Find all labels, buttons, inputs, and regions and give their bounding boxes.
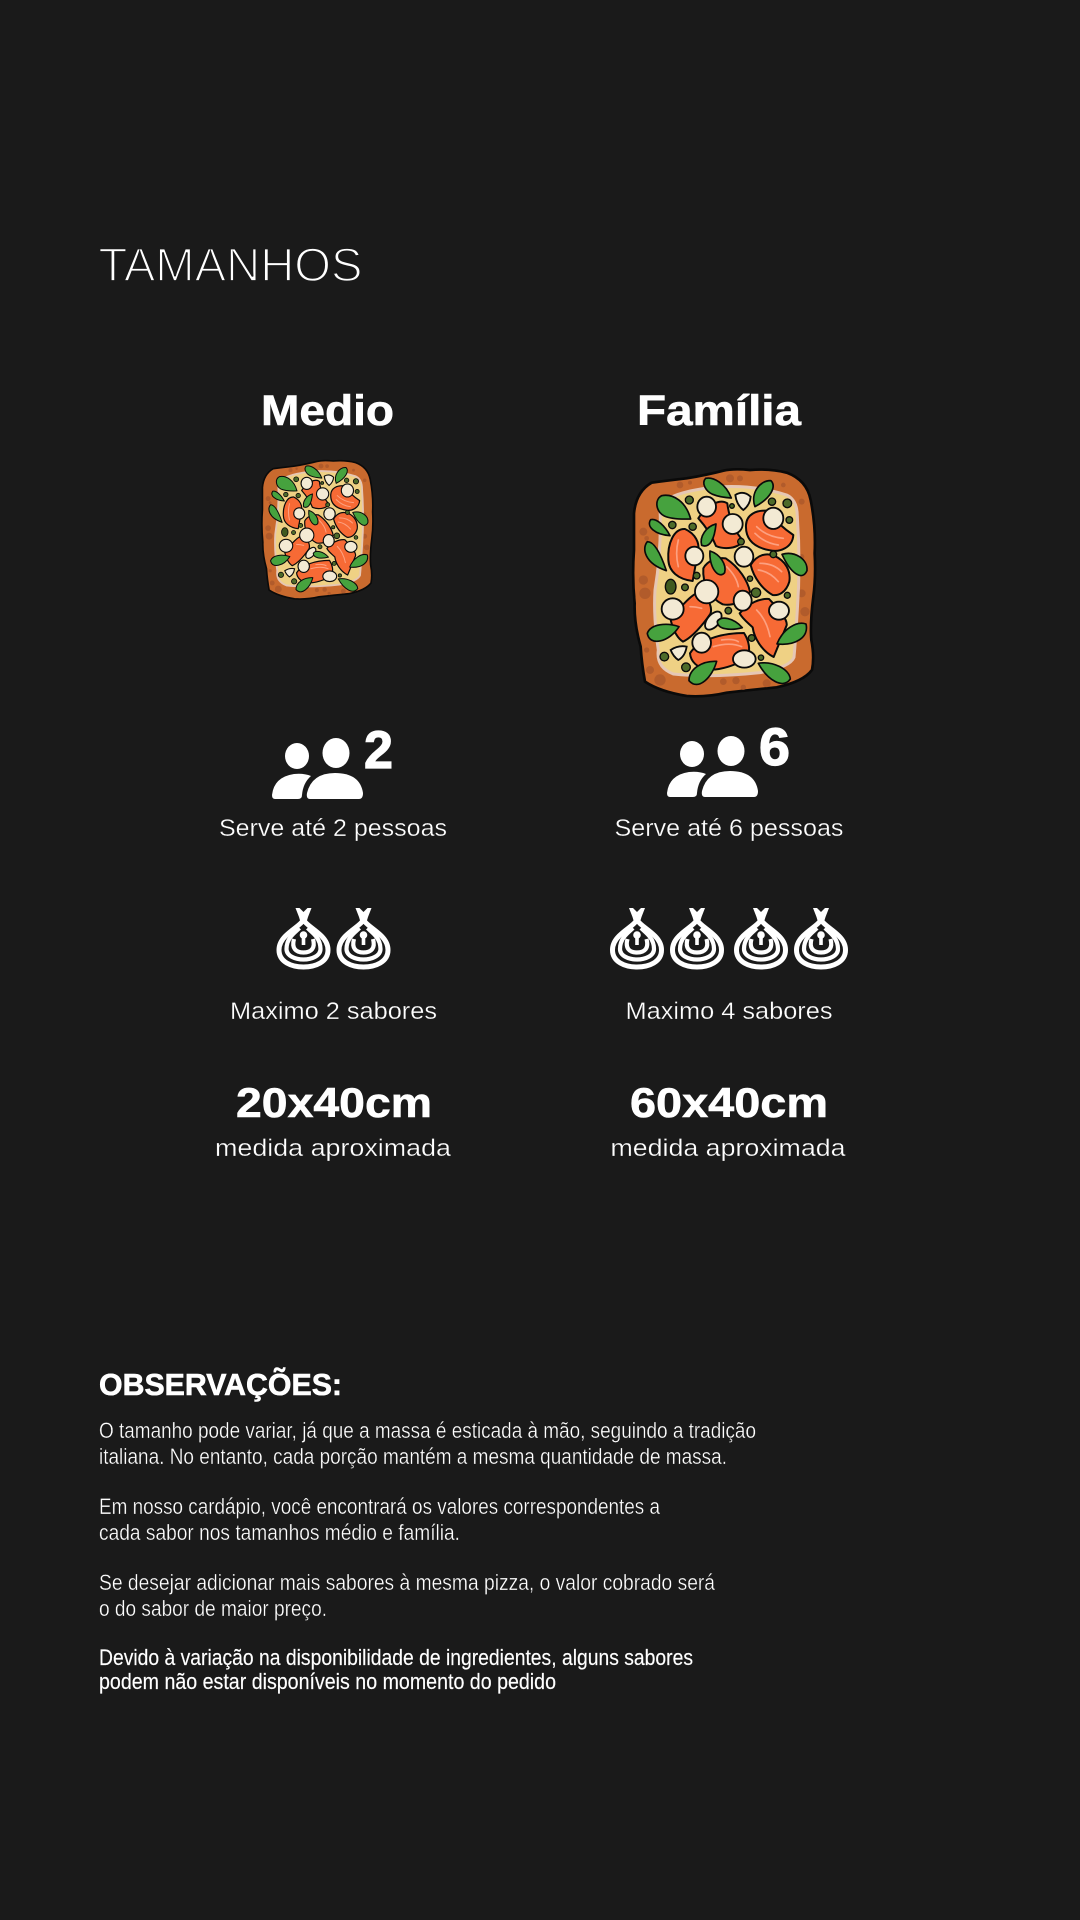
title: TAMANHOS	[98, 238, 362, 291]
icon: 4 flavours	[612, 908, 846, 967]
icon: 2 people: 2	[364, 721, 393, 780]
text: serves: Serve até 2 pessoas	[219, 815, 447, 842]
heading: observations: OBSERVAÇÕES:	[99, 1366, 342, 1402]
note 3: o do sabor de maior preço.	[99, 1596, 327, 1621]
heading: familia: Família	[637, 387, 802, 435]
note 4: bold	[99, 1645, 693, 1694]
panel: observations	[99, 1366, 756, 1694]
text: approximate: medida aproximada	[610, 1135, 846, 1162]
pizza: familia	[633, 469, 815, 696]
icon: 6 people: 6	[759, 718, 790, 777]
text: approximate: medida aproximada	[215, 1135, 452, 1162]
pizza: medio	[262, 461, 373, 599]
note 2: Em nosso cardápio, você encontrará os valores correspondentes a	[99, 1494, 661, 1519]
note 3	[99, 1570, 716, 1621]
note 2: cada sabor nos tamanhos médio e família.	[99, 1520, 460, 1545]
note 4: bold: podem não estar disponíveis no momento do pedido	[99, 1669, 556, 1694]
measure: 60x40cm	[630, 1079, 828, 1126]
heading: medio: Medio	[261, 387, 394, 435]
note 4: bold: Devido à variação na disponibilidade de ingredientes, alguns sabores	[99, 1645, 693, 1670]
text: flavours: Maximo 2 sabores	[230, 998, 437, 1025]
note 1: italiana. No entanto, cada porção mantém a mesma quantidade de massa.	[99, 1444, 727, 1469]
note 3: Se desejar adicionar mais sabores à mesma pizza, o valor cobrado será	[99, 1570, 716, 1595]
text: serves: Serve até 6 pessoas	[614, 815, 844, 842]
measure: 20x40cm	[236, 1079, 432, 1126]
panel: familia	[610, 387, 846, 1162]
icon: 6 people	[667, 718, 790, 797]
note 2	[99, 1494, 661, 1545]
icon: 2 people	[272, 721, 393, 799]
panel: medio	[215, 387, 452, 1162]
icon: 2 flavours	[279, 908, 388, 967]
text: flavours: Maximo 4 sabores	[626, 998, 832, 1025]
note 1	[99, 1418, 756, 1469]
note 1: O tamanho pode variar, já que a massa é esticada à mão, seguindo a tradição	[99, 1418, 756, 1443]
